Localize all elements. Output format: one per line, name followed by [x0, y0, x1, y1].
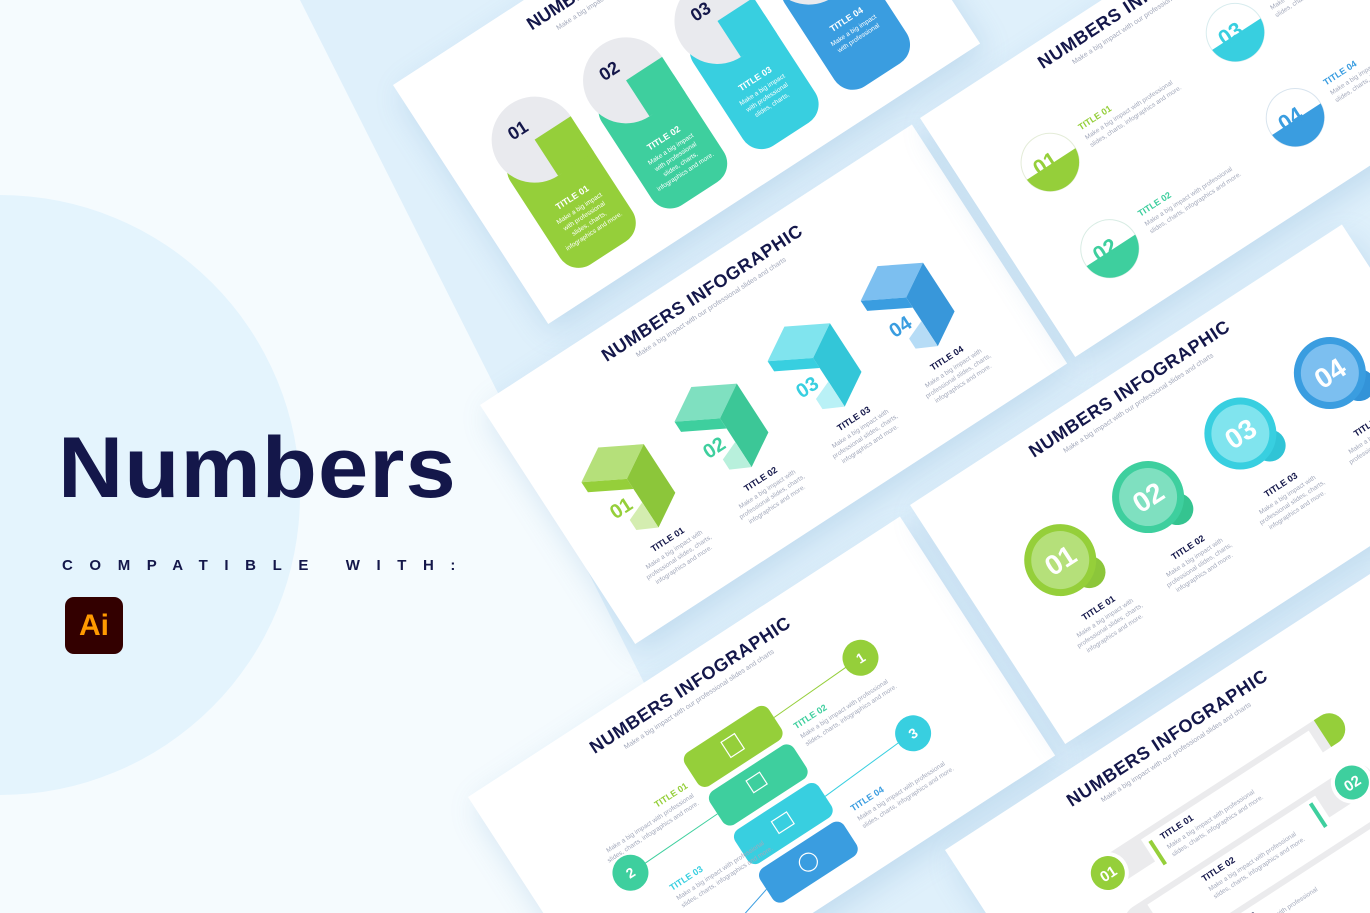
- pill 03: TITLE 03: [737, 64, 773, 93]
- bar 01: Make a big impact with professional: [1166, 789, 1256, 851]
- pill 01: 01: [504, 116, 532, 144]
- timeline labels: TITLE 04: [849, 784, 886, 813]
- box 01: [571, 426, 686, 549]
- bar 02: 02: [1341, 772, 1364, 795]
- pill 01: slides, charts,: [571, 210, 608, 238]
- bubble 02: [1098, 447, 1201, 552]
- slide 3: timeline: [468, 517, 1055, 913]
- number circles: 2: [623, 864, 638, 882]
- timeline labels: TITLE 02: [792, 702, 829, 731]
- labels: [1072, 0, 1370, 237]
- labels: infographics and more.: [1085, 612, 1145, 654]
- pill 02: slides, charts,: [662, 151, 700, 178]
- bubble 01: 01: [1039, 539, 1082, 582]
- pill 01: with professional: [561, 200, 607, 233]
- slide 6: bars: [945, 570, 1370, 913]
- bar 02: Make a big impact with professional: [1208, 831, 1298, 893]
- bar 02: TITLE 02: [1200, 855, 1237, 884]
- bar 02: [1116, 753, 1370, 913]
- bar 01: slides, charts, infographics and more.: [1171, 794, 1265, 858]
- slide 4: half circles: [920, 0, 1370, 357]
- circle 02: 02: [1088, 233, 1122, 267]
- labels: Make a big impact with professional: [1144, 166, 1234, 228]
- bubble 04: 04: [1309, 352, 1352, 395]
- timeline labels: [594, 654, 956, 913]
- labels: TITLE 03: [835, 404, 872, 433]
- pill 01: TITLE 01: [554, 183, 591, 212]
- labels: infographics and more.: [1268, 489, 1327, 531]
- labels: TITLE 03: [1262, 470, 1299, 499]
- slide 2: 3D numbers: Make a big impact with our professional slides and charts: [635, 256, 788, 359]
- labels: professional slides, charts,: [645, 534, 713, 581]
- labels: infographics and more.: [934, 363, 993, 405]
- slide 3: timeline: Make a big impact with our professional slides and charts: [623, 648, 776, 751]
- labels: professional slides, charts,: [1166, 542, 1234, 589]
- timeline labels: slides, charts, infographics and more.: [606, 800, 700, 865]
- pill 02: with professional: [653, 141, 699, 174]
- labels: TITLE 01: [649, 525, 686, 554]
- pill 02: infographics and more.: [656, 151, 715, 193]
- labels: professional slides, charts,: [1258, 479, 1327, 527]
- labels: TITLE 04: [1322, 59, 1358, 87]
- box 02: 02: [699, 433, 730, 464]
- slide 5: bubbles: [910, 225, 1370, 744]
- circle 01: 01: [1028, 146, 1062, 181]
- labels: [1060, 399, 1370, 657]
- pill 04: [749, 0, 918, 98]
- timeline labels: Make a big impact with professional: [675, 840, 766, 902]
- labels: slides, charts, infographics and more.: [1089, 84, 1183, 149]
- icon: Adobe Illustrator: [65, 597, 123, 654]
- pill 03: with professional: [744, 81, 790, 114]
- labels: infographics and more.: [1175, 552, 1234, 594]
- timeline labels: TITLE 03: [668, 864, 705, 893]
- labels: [633, 333, 998, 589]
- circle 02: [1080, 219, 1140, 278]
- labels: Make a big impact with: [645, 529, 704, 571]
- slide 5: bubbles: NUMBERS INFOGRAPHIC: [1025, 317, 1233, 461]
- pill 02: Make a big impact: [647, 132, 695, 167]
- timeline labels: Make a big impact with professional: [605, 792, 696, 854]
- box 01: 01: [606, 493, 637, 524]
- labels: professional slides, charts,: [831, 413, 900, 460]
- number circles: [576, 631, 938, 913]
- bar 03: [1146, 804, 1370, 913]
- labels: infographics and more.: [748, 484, 807, 526]
- pill 02: 02: [595, 57, 623, 85]
- labels: Make a big impact with: [1076, 597, 1135, 639]
- pill 04: TITLE 04: [828, 5, 865, 34]
- pill 02: TITLE 02: [645, 124, 682, 153]
- slide 3: timeline: NUMBERS INFOGRAPHIC: [586, 613, 794, 758]
- bar 01: TITLE 01: [1158, 813, 1195, 842]
- labels: Make a big impact with: [1165, 537, 1225, 579]
- pill 01: Make a big impact: [556, 191, 604, 226]
- slide 2: 3D numbers: [480, 125, 1067, 644]
- slide 2: 3D numbers: NUMBERS INFOGRAPHIC: [598, 221, 806, 366]
- timeline labels: TITLE 01: [653, 781, 689, 810]
- number circles: 1: [853, 649, 868, 667]
- labels: Make a big impact with: [831, 408, 890, 450]
- bubble 02: 02: [1127, 476, 1170, 519]
- labels: TITLE 04: [928, 344, 965, 373]
- labels: TITLE 02: [742, 465, 779, 494]
- subtitle: compatible with: COMPATIBLE WITH:: [62, 557, 472, 574]
- labels: Make a big impact with: [738, 468, 797, 511]
- circle 04: 04: [1273, 101, 1308, 136]
- slide 6: bars: NUMBERS INFOGRAPHIC: [1063, 666, 1271, 811]
- labels: Make a big impact with: [1258, 474, 1318, 516]
- number circles: 3: [905, 724, 921, 742]
- labels: Make a big impact with: [924, 348, 984, 390]
- labels: infographics and more.: [841, 423, 900, 465]
- bubble 03: 03: [1219, 412, 1262, 455]
- circle 04: [1266, 88, 1325, 148]
- tags: [680, 702, 861, 906]
- pill 03: Make a big impact: [738, 73, 787, 107]
- bar 02: slides, charts, infographics and more.: [1212, 836, 1307, 900]
- box 02: [664, 365, 779, 489]
- timeline labels: slides, charts, infographics and more.: [861, 765, 956, 830]
- pill 01: infographics and more.: [565, 210, 624, 252]
- title: Numbers: [58, 420, 457, 516]
- timeline labels: Make a big impact with professional: [799, 678, 890, 740]
- labels: TITLE 01: [1076, 103, 1113, 132]
- pill 03: slides, charts,: [754, 91, 791, 119]
- background circle: [0, 195, 300, 795]
- labels: professional slides, charts,: [1076, 602, 1144, 650]
- slide 1: pills: [393, 0, 980, 324]
- circle 01: [1020, 132, 1080, 192]
- labels: Make a big impact with professional: [1084, 79, 1175, 141]
- labels: TITLE 01: [1080, 594, 1117, 622]
- bubble 04: [1280, 323, 1370, 428]
- labels: TITLE 02: [1170, 533, 1206, 562]
- labels: professional slides, charts,: [738, 473, 807, 521]
- bubble 01: [1010, 510, 1113, 615]
- bar 01: 01: [1097, 863, 1120, 886]
- bar 01: [1079, 703, 1359, 910]
- box 04: 04: [885, 312, 917, 343]
- pill 01: [475, 80, 644, 276]
- box 03: [757, 305, 872, 428]
- timeline labels: Make a big impact with professional: [856, 760, 947, 823]
- circle 03: 03: [1213, 17, 1248, 51]
- icon: Adobe Illustrator: Ai: [79, 609, 109, 642]
- slide 6: bars: Make a big impact with our professional slides and charts: [1100, 701, 1253, 804]
- labels: professional slides, charts,: [925, 352, 993, 400]
- pill 04: with professional: [836, 22, 881, 55]
- connector lines: [616, 666, 938, 913]
- box 03: 03: [792, 373, 823, 403]
- timeline labels: slides, charts, infographics and more.: [680, 845, 775, 909]
- box 04: [850, 244, 965, 368]
- labels: slides, charts, infographics and more.: [1149, 171, 1243, 235]
- labels: TITLE 02: [1136, 190, 1173, 219]
- pill 04: Make a big impact: [830, 13, 878, 48]
- pill 03: [658, 0, 827, 158]
- bubble 03: [1191, 384, 1293, 488]
- slide 5: bubbles: Make a big impact with our professional slides and charts: [1062, 352, 1215, 455]
- labels: infographics and more.: [655, 544, 714, 586]
- timeline labels: slides, charts, infographics and more.: [804, 683, 899, 748]
- circle 03: [1206, 2, 1265, 62]
- pill 02: [567, 21, 736, 217]
